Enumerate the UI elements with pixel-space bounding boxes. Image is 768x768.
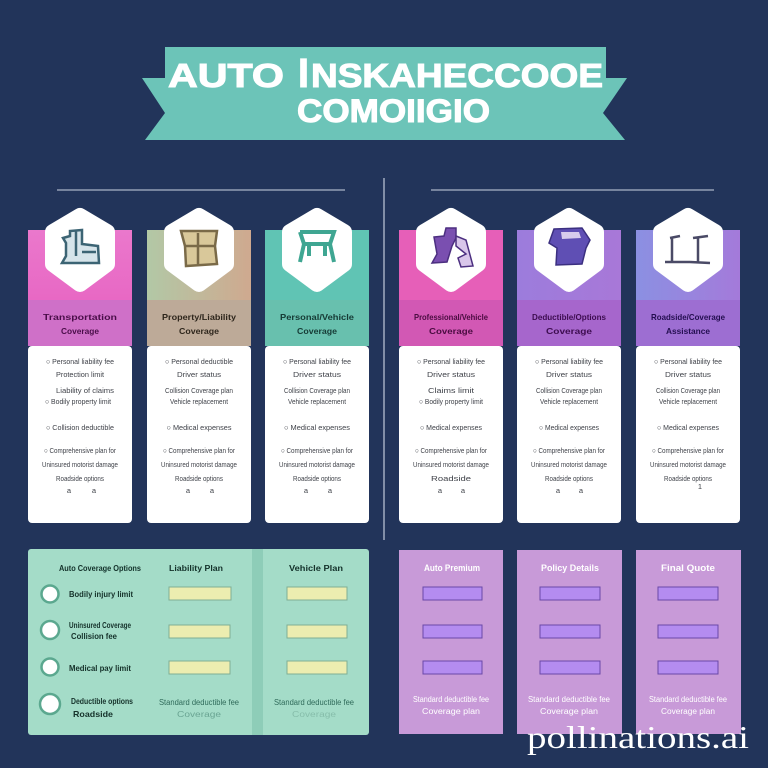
card 2 text: ○ Comprehensive plan for (163, 446, 235, 455)
green row labels (69, 589, 133, 719)
card 5 text (531, 357, 607, 495)
card 2 text: ○ Medical expenses (166, 423, 232, 432)
card 1 text: Roadside options (56, 474, 104, 483)
card 1 text: Liability of claims (56, 386, 114, 395)
card 4 text: ○ Bodily property limit (419, 397, 484, 406)
card 5 text: a (579, 486, 584, 495)
card 3 text: Roadside options (293, 474, 341, 483)
card 4 text (413, 357, 489, 495)
title: AUTO (168, 57, 284, 94)
green table headings: Auto Coverage Options (59, 564, 142, 573)
card 5 heading: Coverage (546, 326, 592, 336)
purple column 1 heading: Auto Premium (424, 563, 480, 573)
card 5 (517, 216, 621, 523)
card 2 text: a (186, 486, 191, 495)
panel: green comparison table (28, 549, 369, 735)
icon: card 6 (665, 236, 710, 263)
card 5 text: ○ Comprehensive plan for (533, 446, 605, 455)
card 6 (636, 216, 740, 523)
card 6 text: Uninsured motorist damage (650, 460, 726, 469)
card 3 text: ○ Comprehensive plan for (281, 446, 353, 455)
green table headings: Liability Plan (169, 564, 223, 573)
card 3 text: Driver status (293, 370, 341, 379)
card 1 text (42, 357, 118, 495)
card 6 text: Driver status (665, 370, 711, 379)
green row labels: Medical pay limit (69, 663, 131, 673)
panel: purple column 2 (517, 550, 622, 734)
card 5 heading: Deductible/Options (532, 312, 606, 322)
card 6 text: Roadside options (664, 474, 712, 483)
card 6 text: ○ Medical expenses (657, 423, 719, 432)
card 2 heading: Property/Liability (162, 312, 236, 322)
purple column 2 bars (540, 587, 600, 674)
green table headings (59, 564, 343, 573)
green table headings: Vehicle Plan (289, 564, 343, 573)
card 2 text: Driver status (177, 370, 221, 379)
card 3 text: ○ Personal liability fee (283, 357, 351, 366)
card 5 text: Driver status (546, 370, 592, 379)
card 6 text: ○ Comprehensive plan for (652, 446, 724, 455)
card 1 text: ○ Personal liability fee (46, 357, 114, 366)
card 4 text: ○ Comprehensive plan for (415, 446, 487, 455)
card 4 heading: Coverage (429, 326, 473, 336)
card 6 heading (651, 312, 725, 336)
card 6 text: Collision Coverage plan (656, 386, 720, 395)
card 6 heading: Roadside/Coverage (651, 312, 725, 322)
panel: purple column 3 (636, 550, 741, 734)
purple column 1 bars (423, 587, 482, 674)
icon: card 1 (62, 230, 99, 263)
card 6 text: ○ Personal liability fee (654, 357, 722, 366)
card 6 heading: Assistance (666, 326, 710, 336)
card 4 heading (414, 312, 488, 336)
green column footers: Coverage (292, 710, 337, 719)
card 4 text: ○ Personal liability fee (417, 357, 485, 366)
card 3 text: Vehicle replacement (288, 397, 347, 406)
card 1 text: Protection limit (56, 370, 105, 379)
purple column 2 footer (528, 695, 611, 716)
card 5 heading (532, 312, 606, 336)
card 3 text: Uninsured motorist damage (279, 460, 355, 469)
card 5 text: ○ Personal liability fee (535, 357, 603, 366)
purple column 3 heading: Final Quote (661, 563, 715, 573)
green row labels: Roadside (73, 709, 113, 719)
green value bars (169, 587, 347, 674)
card 1 text: a (67, 486, 72, 495)
card 1 heading: Coverage (61, 326, 99, 336)
title: I (298, 50, 309, 96)
purple column 3 footer: Coverage plan (661, 707, 715, 716)
purple column 2 footer: Coverage plan (540, 707, 598, 716)
purple column 1 footer: Standard deductible fee (413, 695, 489, 704)
divider lines (57, 178, 714, 540)
card 5 text: a (556, 486, 561, 495)
card 4 text: Uninsured motorist damage (413, 460, 489, 469)
green row labels: Deductible options (71, 696, 133, 706)
title: COMOIIGIO (297, 93, 490, 129)
card 3 (265, 216, 369, 523)
card 2 heading (162, 312, 236, 336)
purple column 3 footer: Standard deductible fee (649, 695, 728, 704)
title: NSKAHECCOOE (311, 57, 603, 94)
purple column 2 footer: Standard deductible fee (528, 695, 611, 704)
card 3 heading: Coverage (297, 326, 337, 336)
card 6 text: Vehicle replacement (659, 397, 718, 406)
card 2 text: Roadside options (175, 474, 223, 483)
card 2 text (161, 357, 237, 495)
card 5 text: ○ Medical expenses (539, 423, 599, 432)
purple column 3 footer (649, 695, 728, 716)
green row labels: Bodily injury limit (69, 589, 133, 599)
card 2 text: a (210, 486, 215, 495)
card 2 text: ○ Personal deductible (165, 357, 233, 366)
green column footers: Coverage (177, 710, 222, 719)
green row labels: Uninsured Coverage (69, 620, 131, 630)
card 4 text: ○ Medical expenses (420, 423, 482, 432)
green column footers: Standard deductible fee (274, 698, 355, 707)
card 1 text: ○ Comprehensive plan for (44, 446, 116, 455)
green row labels: Collision fee (71, 631, 117, 641)
card 6 text (650, 357, 726, 491)
panel: purple column 1 (399, 550, 503, 734)
green column footers: Standard deductible fee (159, 698, 240, 707)
purple column 1 footer (413, 695, 489, 716)
icon: card 3 (300, 232, 334, 262)
card 2 (147, 216, 251, 523)
icon: card 4 (432, 228, 473, 267)
card 1 text: Uninsured motorist damage (42, 460, 118, 469)
card 3 text: a (328, 486, 333, 495)
card 2 text: Collision Coverage plan (165, 386, 233, 395)
card 4 text: Roadside (431, 474, 471, 483)
watermark: pollinations.ai (527, 719, 749, 755)
card 3 heading (280, 312, 354, 336)
icon: card 2 (181, 231, 217, 266)
purple column 3 bars (658, 587, 718, 674)
card 1 text: ○ Bodily property limit (45, 397, 112, 406)
title (168, 50, 603, 129)
card 3 heading: Personal/Vehicle (280, 312, 354, 322)
icon: card 5 (549, 228, 590, 265)
card 5 text: Uninsured motorist damage (531, 460, 607, 469)
card 4 text: a (461, 486, 466, 495)
card 4 heading: Professional/Vehicle (414, 312, 488, 322)
card 5 text: Roadside options (545, 474, 593, 483)
card 2 heading: Coverage (179, 326, 219, 336)
card 4 text: Driver status (427, 370, 475, 379)
card 5 text: Collision Coverage plan (536, 386, 602, 395)
card 1 text: a (92, 486, 97, 495)
card 3 text: ○ Medical expenses (284, 423, 350, 432)
green row icons (40, 586, 60, 714)
card 6 text: 1 (698, 482, 702, 491)
card 2 text: Vehicle replacement (170, 397, 229, 406)
card 1 (28, 216, 132, 523)
green column footers (159, 698, 355, 719)
card 2 text: Uninsured motorist damage (161, 460, 237, 469)
card 4 (399, 216, 503, 523)
card 5 text: Vehicle replacement (540, 397, 599, 406)
card 3 text: Collision Coverage plan (284, 386, 350, 395)
purple column 1 footer: Coverage plan (422, 707, 480, 716)
purple column 2 heading: Policy Details (541, 563, 599, 573)
card 4 text: Claims limit (428, 386, 475, 395)
card 1 heading (43, 312, 117, 336)
card 1 heading: Transportation (43, 312, 117, 322)
card 4 text: a (438, 486, 443, 495)
card 3 text: a (304, 486, 309, 495)
card 3 text (279, 357, 355, 495)
title ribbon (142, 47, 627, 140)
card 1 text: ○ Collision deductible (46, 423, 114, 432)
